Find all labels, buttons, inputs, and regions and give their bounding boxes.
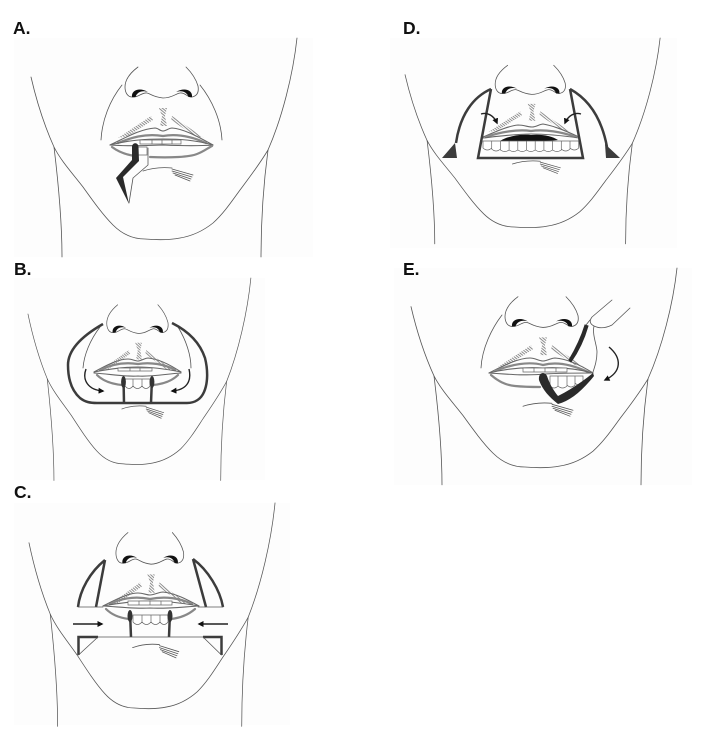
right flap line D xyxy=(570,89,620,158)
chin crease D xyxy=(512,161,560,173)
flap incision A xyxy=(116,143,148,204)
panel: B xyxy=(14,259,265,481)
panel: E xyxy=(394,259,692,485)
teeth D xyxy=(483,141,579,152)
chin crease B xyxy=(122,406,164,418)
face outline D xyxy=(405,38,660,244)
incision E xyxy=(539,325,594,404)
teeth E xyxy=(550,376,583,388)
lower teeth C xyxy=(133,615,168,624)
lips A xyxy=(110,128,213,157)
face outline E xyxy=(411,268,677,485)
nasolabial folds B xyxy=(83,327,191,368)
lips D xyxy=(483,124,579,142)
arrow E xyxy=(605,347,618,380)
lips B xyxy=(94,358,181,385)
heading: D: D. xyxy=(403,18,420,38)
rectangular incision D xyxy=(478,89,583,158)
arrow left D xyxy=(481,113,497,123)
lower horizontal incision C xyxy=(78,637,222,655)
arrow right C xyxy=(199,623,228,625)
lips E xyxy=(489,358,593,387)
chin crease C xyxy=(133,644,179,658)
arrow left C xyxy=(73,623,102,625)
arrow left B xyxy=(85,369,103,391)
heading: B: B. xyxy=(14,259,32,279)
arrow right D xyxy=(565,113,581,123)
panel: A xyxy=(13,18,313,257)
outer incision B xyxy=(68,323,207,403)
face outline C xyxy=(29,503,275,726)
upper left flap C xyxy=(78,560,105,607)
heading: A: A. xyxy=(13,18,30,38)
arrow right B xyxy=(172,369,190,391)
upper right flap C xyxy=(193,559,223,607)
nasolabial folds A xyxy=(101,85,222,140)
vertical incisions C xyxy=(128,610,172,637)
chin crease A xyxy=(143,168,193,181)
face outline A xyxy=(31,38,297,257)
heading: C: C. xyxy=(14,482,32,502)
nasolabial fold E xyxy=(481,315,502,368)
lower teeth B xyxy=(125,379,150,388)
chin crease E xyxy=(523,403,573,416)
flap and finger E xyxy=(586,300,630,372)
face outline B xyxy=(28,278,251,481)
panel: D xyxy=(390,18,677,248)
vertical incisions B xyxy=(121,376,154,403)
heading: E: E. xyxy=(403,259,420,279)
lips C xyxy=(103,592,199,619)
left flap line D xyxy=(442,89,491,158)
panel: C xyxy=(14,482,290,726)
